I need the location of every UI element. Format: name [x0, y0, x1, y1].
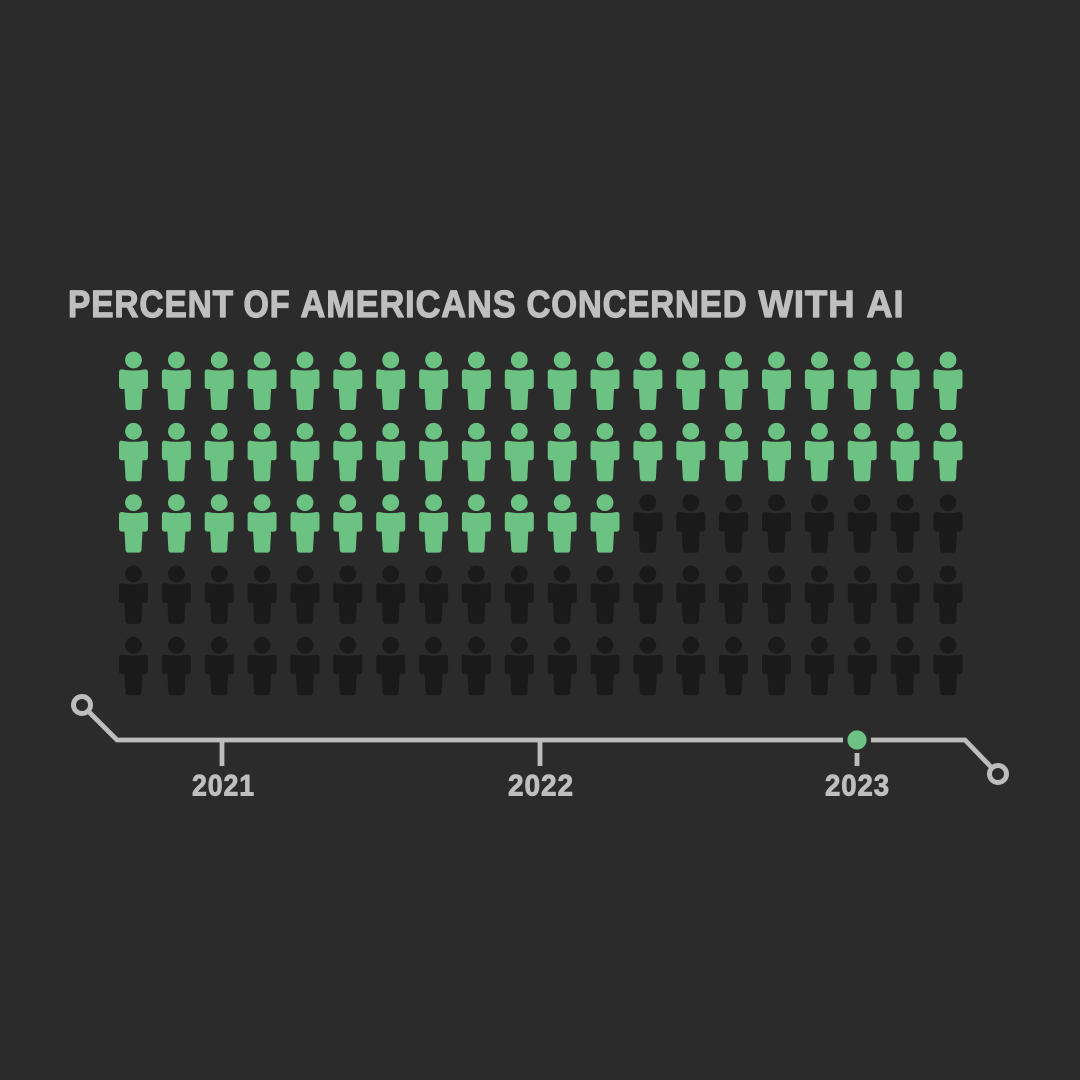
row 3: 12 green people [119, 494, 620, 553]
title: CONCERNED [526, 284, 748, 326]
row 5: 20 dark people [119, 637, 962, 695]
row 4: 20 dark people [119, 566, 962, 624]
pictogram chart: 52 of 100 people highlighted [119, 352, 962, 695]
label 2021: 2021 [192, 770, 255, 802]
timeline track [88, 712, 992, 768]
label 2023: 2023 [825, 770, 890, 802]
title: WITH [758, 284, 856, 326]
title: OF [244, 284, 290, 326]
row 2: 20 green people [119, 423, 962, 481]
current year marker [847, 730, 867, 750]
label 2022: 2022 [508, 770, 574, 802]
title: AI [866, 284, 904, 326]
title: AMERICANS [300, 284, 516, 326]
timeline [74, 696, 1006, 802]
title: PERCENT [68, 284, 234, 326]
row 1: 20 green people [119, 352, 962, 410]
row 3: 8 dark people [633, 494, 962, 553]
start marker [74, 696, 90, 714]
end marker [990, 766, 1006, 782]
